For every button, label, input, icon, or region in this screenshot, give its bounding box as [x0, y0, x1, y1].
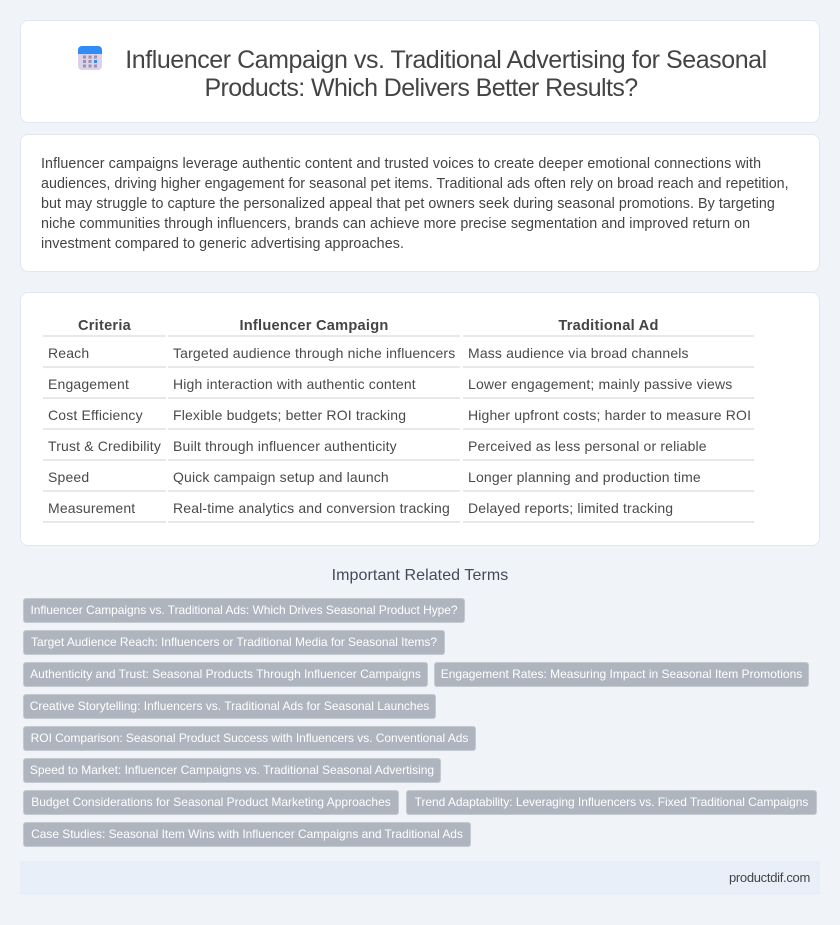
comparison table: Targeted audience through niche influencers — [173, 345, 455, 361]
icon: calendar — [78, 46, 102, 70]
intro text: Influencer campaigns leverage authentic content and trusted voices to create deeper emotional connections with — [41, 156, 761, 172]
related terms tags: Case Studies: Seasonal Item Wins with Influencer Campaigns and Traditional Ads — [31, 827, 463, 841]
comparison table: Perceived as less personal or reliable — [468, 438, 707, 454]
comparison table: Trust & Credibility — [48, 438, 161, 454]
comparison table: Lower engagement; mainly passive views — [468, 376, 732, 392]
comparison table: Flexible budgets; better ROI tracking — [173, 407, 406, 423]
comparison table: Measurement — [48, 500, 135, 516]
comparison table: Real-time analytics and conversion tracking — [173, 500, 450, 516]
footer source: productdif.com — [729, 870, 810, 885]
header panel — [20, 20, 820, 123]
comparison table — [43, 318, 754, 523]
title: Influencer Campaign vs. Traditional Advertising for Seasonal — [125, 46, 767, 74]
comparison table: Speed — [48, 469, 89, 485]
comparison table: Traditional Ad — [558, 318, 659, 334]
comparison table: Built through influencer authenticity — [173, 438, 397, 454]
comparison table: Longer planning and production time — [468, 469, 701, 485]
related terms heading: Important Related Terms — [332, 567, 508, 584]
intro text: audiences, driving higher engagement for seasonal pet items. Traditional ads often rely on broad reach and repetition, — [41, 176, 789, 192]
related terms tags: ROI Comparison: Seasonal Product Success with Influencers vs. Conventional Ads — [31, 731, 468, 745]
related terms tags: Budget Considerations for Seasonal Product Marketing Approaches — [31, 795, 391, 809]
related terms tags: Creative Storytelling: Influencers vs. Traditional Ads for Seasonal Launches — [30, 699, 429, 713]
intro text — [41, 156, 789, 252]
related terms tags: Trend Adaptability: Leveraging Influencers vs. Fixed Traditional Campaigns — [415, 795, 808, 809]
intro text: niche communities through influencers, brands can achieve more precise segmentation and improved return on — [41, 216, 750, 232]
intro text: investment compared to generic advertising approaches. — [41, 236, 404, 252]
comparison table panel — [20, 292, 820, 546]
comparison table: Influencer Campaign — [239, 318, 389, 334]
related terms tags: Engagement Rates: Measuring Impact in Seasonal Item Promotions — [441, 667, 802, 681]
comparison table: Criteria — [78, 318, 131, 334]
related terms tags: Speed to Market: Influencer Campaigns vs. Traditional Seasonal Advertising — [30, 763, 434, 777]
comparison table: Engagement — [48, 376, 129, 392]
related terms tags: Influencer Campaigns vs. Traditional Ads: Which Drives Seasonal Product Hype? — [30, 603, 458, 617]
comparison table: High interaction with authentic content — [173, 376, 416, 392]
comparison table: Reach — [48, 345, 89, 361]
comparison table: Cost Efficiency — [48, 407, 143, 423]
title: Products: Which Delivers Better Results? — [204, 74, 638, 102]
related terms tags: Target Audience Reach: Influencers or Traditional Media for Seasonal Items? — [31, 635, 437, 649]
intro text: but may struggle to capture the personalized appeal that pet owners seek during seasonal promotions. By targeting — [41, 196, 775, 212]
footer bar — [20, 861, 820, 895]
comparison table: Higher upfront costs; harder to measure ROI — [468, 407, 751, 423]
intro panel — [20, 134, 820, 272]
comparison table: Quick campaign setup and launch — [173, 469, 389, 485]
title — [125, 46, 767, 102]
related terms tags: Authenticity and Trust: Seasonal Products Through Influencer Campaigns — [30, 667, 421, 681]
related terms tags — [23, 598, 817, 847]
comparison table: Mass audience via broad channels — [468, 345, 689, 361]
comparison table: Delayed reports; limited tracking — [468, 500, 673, 516]
